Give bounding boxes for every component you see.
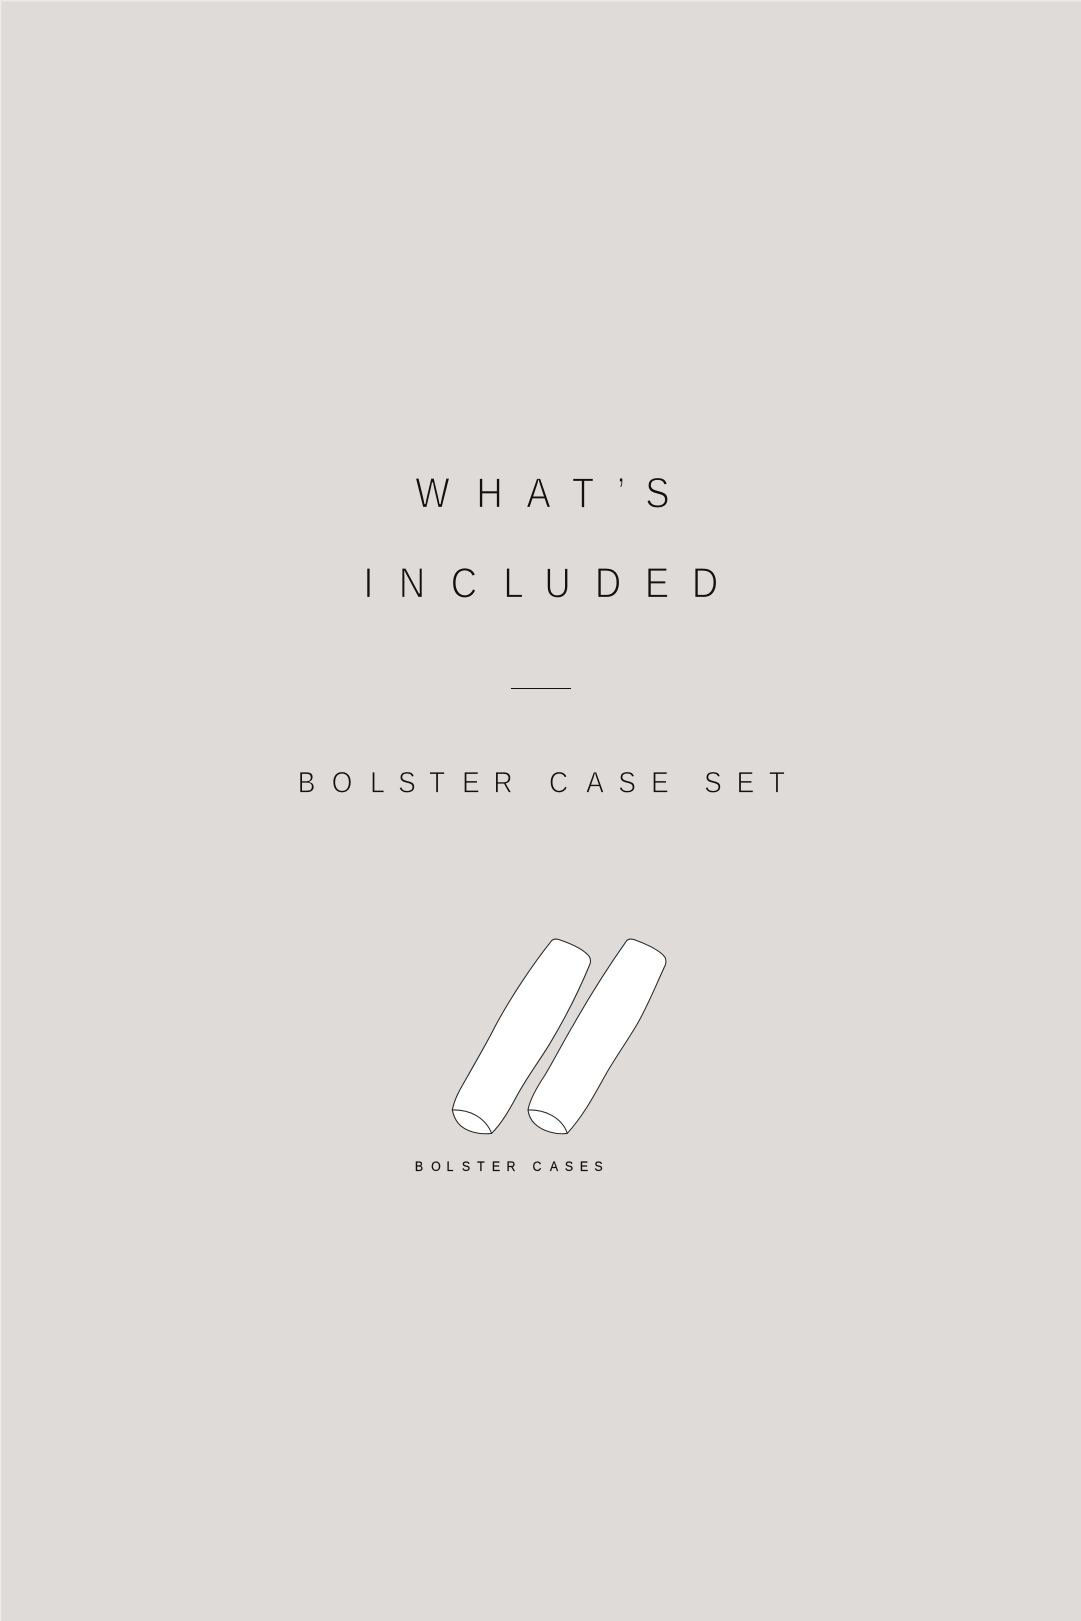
title: what's included: INCLUDED	[363, 560, 718, 607]
icon: right bolster	[528, 939, 666, 1134]
icon: left bolster	[452, 939, 591, 1134]
divider line	[511, 688, 571, 689]
title: what's included	[363, 470, 718, 607]
subtitle: bolster case set: BOLSTER CASE SET	[298, 766, 785, 799]
icon: two bolster cases	[452, 939, 666, 1134]
label: bolster cases: BOLSTER CASES	[415, 1158, 603, 1174]
title: what's included: WHAT’S	[415, 470, 670, 517]
